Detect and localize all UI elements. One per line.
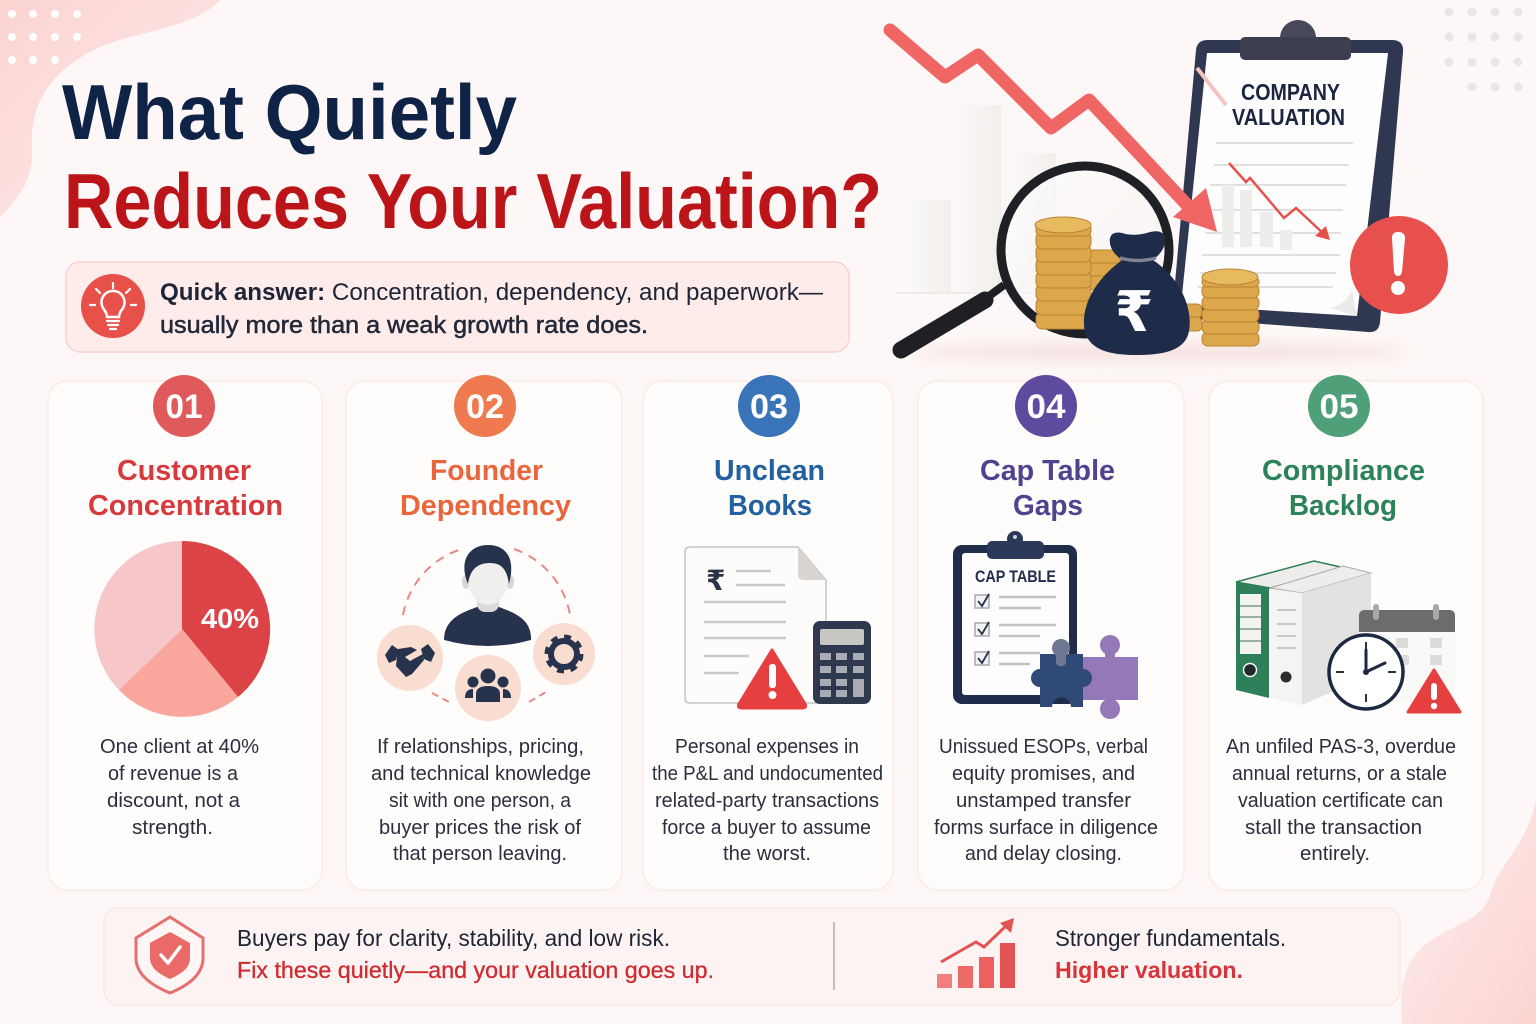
body text: equity promises, and [952,762,1135,785]
heading [400,455,571,522]
panel: bottom banner [104,908,1400,1005]
text: buyers pay: Fix these quietly—and your valuation goes up. [237,957,714,983]
body text [371,735,591,865]
body text [934,735,1158,865]
number badge 02 [454,375,516,437]
body text: annual returns, or a stale [1232,762,1447,785]
title: Reduces Your Valuation? [64,157,882,245]
title: What Quietly [62,68,517,156]
body text: If relationships, pricing, [377,735,584,758]
body text: Unissued ESOPs, verbal [939,735,1148,758]
body text [100,735,259,839]
money bag [1084,231,1190,355]
heading [88,455,283,522]
heading: Concentration [88,490,283,522]
icon: binders, clock and calendar [1236,561,1460,712]
heading: Gaps [1013,490,1083,522]
body text: valuation certificate can [1238,789,1443,812]
body text: unstamped transfer [956,789,1131,812]
icon: rising bars [937,918,1015,988]
body text: entirely. [1300,842,1370,865]
icon: shield [136,917,203,993]
body text: strength. [132,816,213,839]
arrow: falling trend [890,30,1217,232]
heading: Founder [430,455,543,487]
coin stack right [1202,269,1259,346]
body text: One client at 40% [100,735,259,758]
heading: Customer [117,455,251,487]
body text: sit with one person, a [389,789,572,812]
heading: Compliance [1262,455,1425,487]
icon: ledger with warning [685,547,871,708]
coins behind bag [1089,250,1202,331]
body text: discount, not a [107,789,241,812]
callout: quick answer [66,262,849,352]
text: buyers pay [237,925,714,983]
clipboard: VALUATION [1232,104,1345,130]
number badge 05 [1308,375,1370,437]
number badge 04: 04 [1026,388,1066,426]
coin stack left [1035,217,1091,329]
text: stronger fundamentals: Stronger fundamentals. [1055,925,1286,951]
heading [1262,455,1425,522]
body text: of revenue is a [108,762,239,785]
body text: stall the transaction [1245,816,1422,839]
title [62,68,882,245]
number badge 03: 03 [750,388,788,426]
number badge 05: 05 [1320,388,1358,426]
body text [652,735,883,865]
money bag: ₹ [1115,280,1153,343]
text: stronger fundamentals: Higher valuation. [1055,957,1243,983]
body text: Personal expenses in [675,735,859,758]
text: stronger fundamentals [1055,925,1286,983]
icon: founder with dependencies [377,545,595,721]
body text: force a buyer to assume [662,816,871,839]
icon: cap table clipboard with puzzle [953,531,1138,719]
heading [980,455,1115,522]
text: buyers pay: Buyers pay for clarity, stability, and low risk. [237,925,670,951]
panel: compliance backlog [1209,375,1483,890]
body text: and technical knowledge [371,762,591,785]
heading [714,455,825,522]
heading: Backlog [1289,490,1397,522]
clipboard: COMPANY [1241,79,1340,105]
number badge 02: 02 [466,388,504,426]
icon: alert badge [1350,216,1448,314]
clipboard [1173,20,1403,332]
icon: ledger with warning: ₹ [706,565,725,596]
panel: founder dependency [346,375,622,890]
callout: quick answer: Quick answer: Concentration, dependency, and paperwork— [160,279,823,306]
panel: unclean books [643,375,893,890]
heading: Unclean [714,455,825,487]
body text: forms surface in diligence [934,816,1158,839]
background bar chart [895,105,1060,293]
body text: the P&L and undocumented [652,762,883,785]
heading: Cap Table [980,455,1115,487]
body text: An unfiled PAS-3, overdue [1226,735,1456,758]
body text [1226,735,1456,865]
panel: cap table gaps [918,375,1184,890]
number badge 01: 01 [166,388,202,426]
body text: that person leaving. [393,842,567,865]
body text: related-party transactions [655,789,879,812]
callout: quick answer: usually more than a weak growth rate does. [160,312,648,339]
pie chart: 40%: 40% [201,603,259,634]
body text: and delay closing. [965,842,1122,865]
number badge 01 [153,375,215,437]
panel: customer concentration [48,375,322,890]
pie chart: 40% [94,541,270,717]
illustration: falling valuation [890,20,1448,362]
number badge 04 [1015,375,1077,437]
body text: the worst. [723,842,811,865]
heading: Books [728,490,812,522]
magnifying glass [901,166,1169,350]
icon: light bulb [81,274,145,338]
number badge 03 [738,375,800,437]
body text: buyer prices the risk of [379,816,581,839]
icon: cap table clipboard with puzzle: CAP TABLE [975,567,1056,586]
heading: Dependency [400,490,571,522]
